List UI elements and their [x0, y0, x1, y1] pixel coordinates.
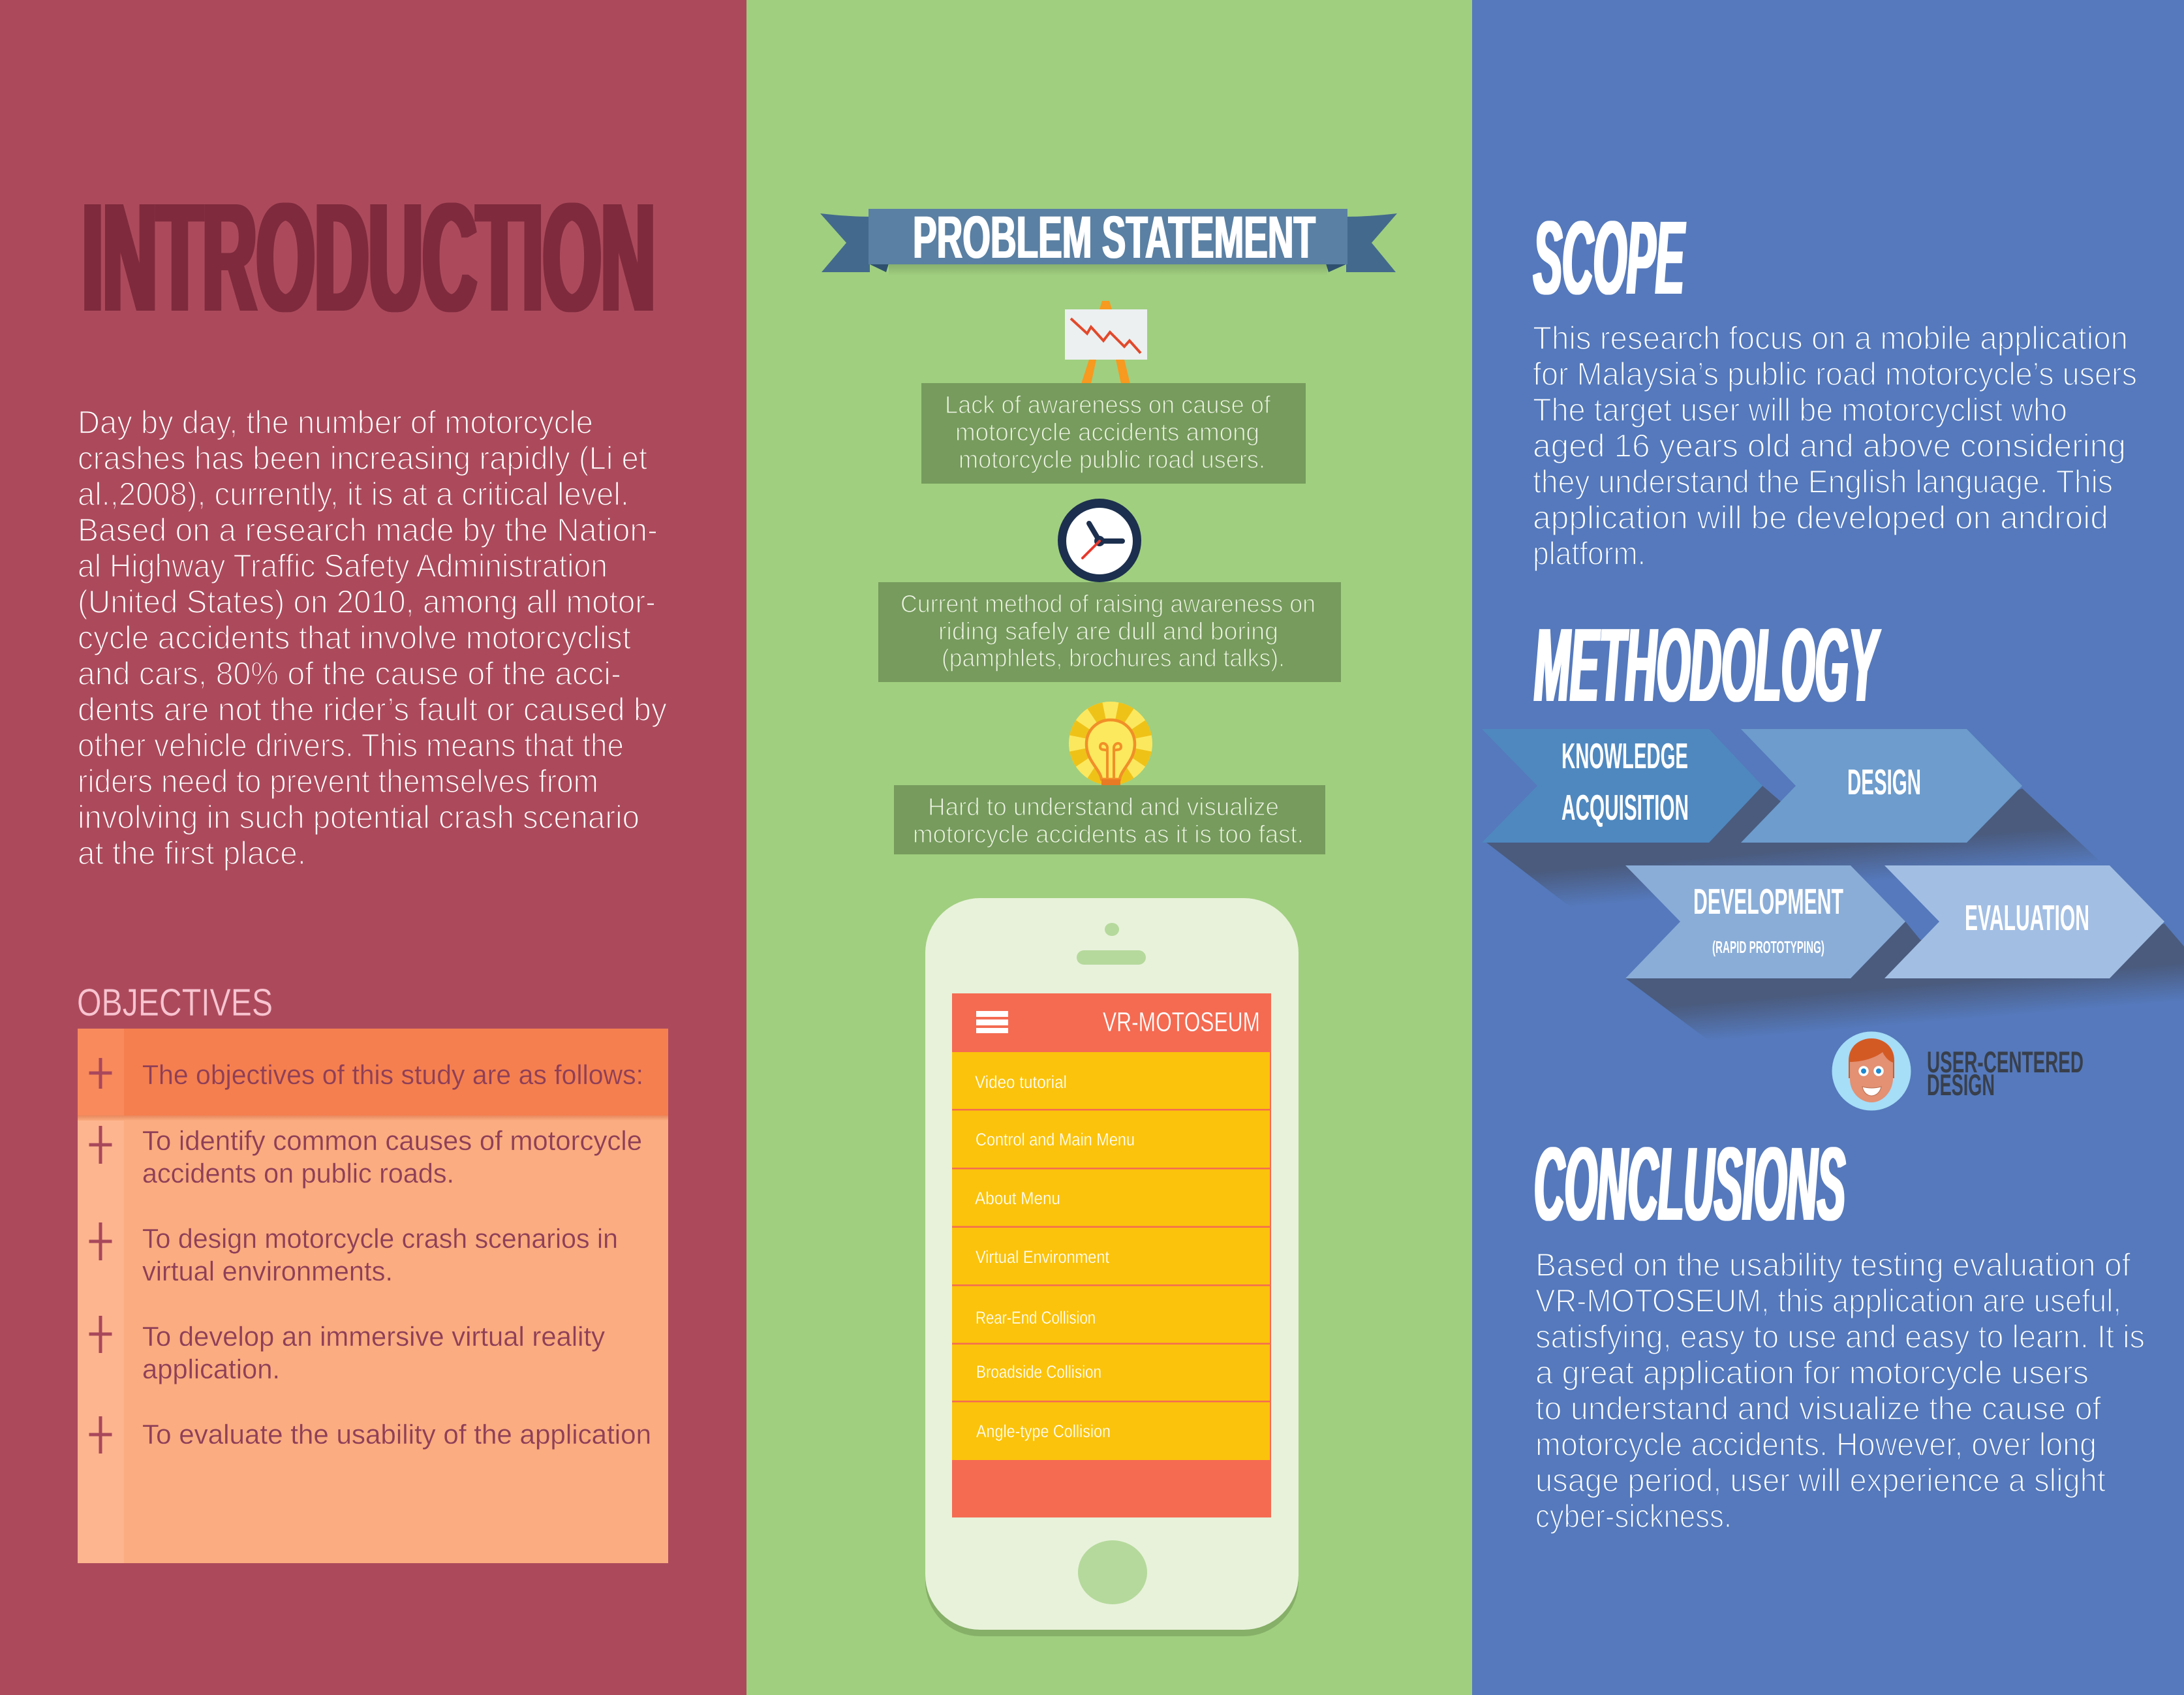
objective 4: To evaluate the usability of the application [142, 1419, 651, 1450]
text block: introduction body: involving in such potential crash scenario [78, 799, 639, 835]
icon: plus 2 [89, 1126, 112, 1164]
menu items: Rear-End Collision [976, 1308, 1096, 1328]
objective 2: virtual environments. [142, 1256, 393, 1286]
icon: plus 3 [89, 1222, 112, 1260]
phone screen [952, 993, 1271, 1517]
menu items: Video tutorial [975, 1072, 1067, 1092]
text block: introduction body: (United States) on 2010, among all motor- [78, 583, 656, 620]
text block: scope body: application will be developed on android [1533, 499, 2108, 536]
chevron: design: DESIGN [1847, 762, 1921, 802]
panel: scope, methodology, conclusions [1472, 0, 2184, 1695]
menu items: Virtual Environment [976, 1247, 1109, 1267]
text block: conclusions body: a great application for motorcycle users [1535, 1354, 2089, 1391]
panel: introduction: INTRODUCTION [82, 171, 655, 344]
chevron: design [1741, 729, 2022, 843]
heading: objectives: OBJECTIVES [77, 981, 273, 1024]
text block: introduction body: at the first place. [78, 835, 306, 871]
text block: introduction body: Based on a research made by the Nation- [78, 512, 658, 548]
text block: conclusions body: satisfying, easy to use and easy to learn. It is [1535, 1318, 2145, 1355]
text block: introduction body: other vehicle drivers. This means that the [78, 727, 624, 764]
text block: conclusions body [1535, 1247, 2145, 1534]
objective 3: application. [142, 1354, 280, 1384]
label: user-centered design: USER-CENTERED [1927, 1045, 2084, 1079]
callout: hard to visualize: motorcycle accidents as it is too fast. [913, 821, 1304, 848]
text block: scope body: platform. [1533, 535, 1646, 572]
text block: introduction body: cycle accidents that involve motorcyclist [78, 619, 631, 656]
callout: lack of awareness: Lack of awareness on cause of [945, 392, 1270, 419]
menu items [975, 1072, 1135, 1441]
icon: hamburger menu [976, 1011, 1008, 1033]
chevron: development: (RAPID PROTOTYPING) [1712, 937, 1824, 957]
text block: scope body: they understand the English language. This [1533, 463, 2113, 500]
icon: plus 4 [89, 1316, 112, 1353]
callout: dull methods [878, 582, 1341, 682]
icon: user face [1832, 1031, 1911, 1111]
callout: dull methods: riding safely are dull and boring [938, 618, 1278, 645]
text block: introduction body: riders need to prevent themselves from [78, 763, 598, 800]
text block: introduction body: and cars, 80% of the cause of the acci- [78, 655, 621, 692]
panel: problem statement [746, 0, 1472, 1695]
objective 1: To identify common causes of motorcycle [142, 1125, 642, 1156]
objective 1 [142, 1125, 642, 1189]
objectives intro line: The objectives of this study are as follows: [142, 1059, 643, 1090]
text block: scope body: aged 16 years old and above considering [1533, 428, 2126, 464]
text block: introduction body: Day by day, the number of motorcycle [78, 404, 593, 441]
panel: objectives list [78, 1029, 668, 1563]
icon: plus 5 [89, 1416, 112, 1454]
icon: plus 1 [89, 1058, 112, 1089]
objective 2 [142, 1223, 618, 1286]
menu items: About Menu [975, 1189, 1060, 1208]
chevron: knowledge acquisition [1482, 729, 1762, 843]
callout: lack of awareness: motorcycle accidents among [955, 419, 1259, 446]
icon: falling chart on easel [1065, 301, 1147, 384]
icon: light bulb [1069, 702, 1152, 785]
objective 3: To develop an immersive virtual reality [142, 1321, 605, 1352]
label: user-centered design: DESIGN [1927, 1068, 1995, 1102]
text block: scope body [1533, 320, 2137, 572]
chevron: evaluation [1884, 865, 2164, 978]
menu items: Broadside Collision [976, 1362, 1101, 1382]
callout: dull methods: Current method of raising awareness on [900, 591, 1315, 618]
menu items: Control and Main Menu [976, 1130, 1135, 1149]
callout: hard to visualize: Hard to understand and visualize [928, 794, 1279, 821]
text block: conclusions body: motorcycle accidents. However, over long [1535, 1426, 2097, 1463]
process chevrons [1482, 729, 2184, 1051]
phone mockup [925, 898, 1299, 1636]
label: user-centered design [1927, 1045, 2084, 1102]
chevron: development [1625, 865, 1905, 978]
text block: conclusions body: cyber-sickness. [1535, 1498, 1732, 1534]
panel: introduction [0, 0, 746, 1695]
callout: lack of awareness: motorcycle public road users. [959, 446, 1265, 474]
objective 2: To design motorcycle crash scenarios in [142, 1223, 618, 1254]
text block: scope body: This research focus on a mobile application [1533, 320, 2128, 356]
callout: lack of awareness [921, 383, 1306, 484]
text block: introduction body: crashes has been increasing rapidly (Li et [78, 440, 647, 476]
menu items: Angle-type Collision [976, 1422, 1111, 1441]
icon: clock [1058, 499, 1141, 582]
banner title: PROBLEM STATEMENT [913, 204, 1315, 271]
text block: conclusions body: usage period, user will experience a slight [1535, 1462, 2106, 1499]
text block: scope body: for Malaysia’s public road motorcycle’s users [1533, 356, 2137, 392]
app title: VR-MOTOSEUM [1103, 1006, 1260, 1037]
chevron: knowledge acquisition: KNOWLEDGE [1561, 736, 1688, 776]
chevron: development: DEVELOPMENT [1693, 881, 1843, 922]
banner: problem statement [820, 204, 1397, 275]
text block: scope body: The target user will be motorcyclist who [1533, 392, 2067, 428]
callout: hard to visualize [894, 785, 1325, 854]
chevron: knowledge acquisition: ACQUISITION [1561, 787, 1689, 828]
panel: scope, methodology, conclusions: SCOPE [1533, 199, 1685, 316]
text block: conclusions body: VR-MOTOSEUM, this application are useful, [1535, 1283, 2121, 1319]
text block: introduction body: dents are not the rider’s fault or caused by [78, 691, 667, 728]
callout: dull methods: (pamphlets, brochures and talks). [942, 645, 1285, 672]
objective 1: accidents on public roads. [142, 1158, 454, 1189]
objective 3 [142, 1321, 605, 1384]
text block: introduction body: al.,2008), currently, it is at a critical level. [78, 476, 629, 512]
text block: introduction body [78, 404, 667, 871]
text block: introduction body: al Highway Traffic Safety Administration [78, 548, 608, 584]
text block: conclusions body: Based on the usability testing evaluation of [1535, 1247, 2130, 1283]
text block: conclusions body: to understand and visualize the cause of [1535, 1390, 2101, 1427]
